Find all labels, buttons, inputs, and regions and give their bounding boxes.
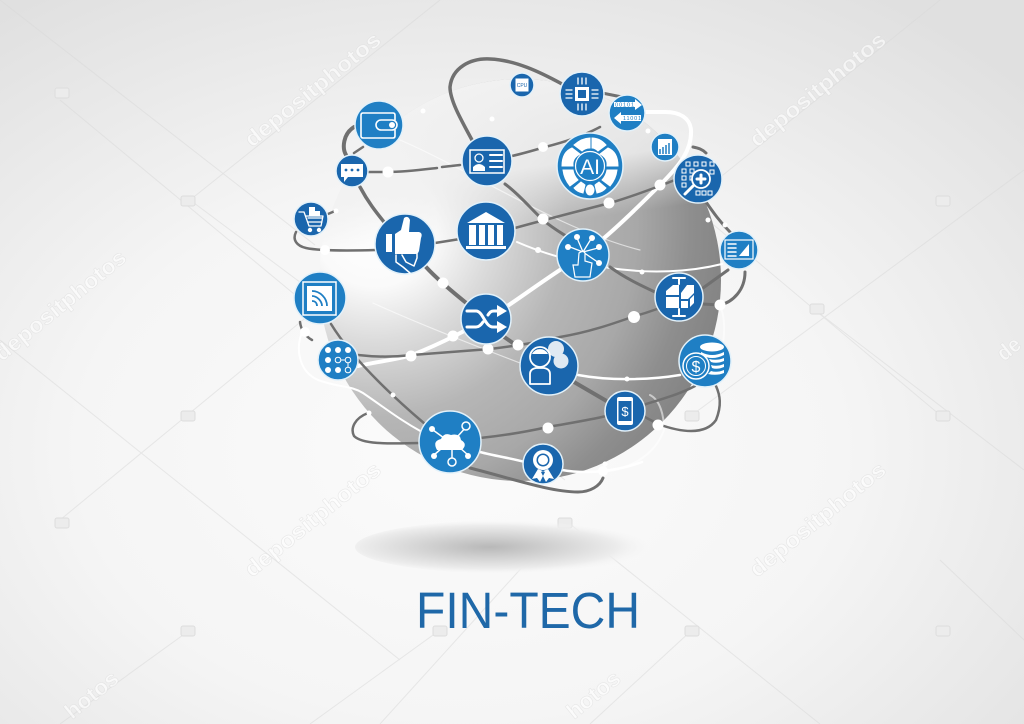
icon: users <box>520 337 578 395</box>
icon: AI brain: AI <box>580 156 600 179</box>
node dots <box>300 108 728 476</box>
icon: dashboard <box>720 231 758 269</box>
icon: processor <box>560 72 604 116</box>
watermarks: hotos <box>561 665 625 724</box>
watermarks: depositphotos <box>744 457 891 582</box>
icon: thumbs up <box>375 214 435 274</box>
icon: binary data: 11001 <box>623 116 641 122</box>
icon: coins: $ <box>692 359 701 376</box>
orbit lines: white behind <box>299 112 724 472</box>
icon: binary data <box>609 95 645 131</box>
icon: dot matrix <box>318 340 358 380</box>
icon: wallet <box>355 101 403 149</box>
icon: chat <box>336 155 368 187</box>
watermarks: depositphotos <box>492 241 639 366</box>
icon: AI brain <box>557 133 623 199</box>
watermarks: depositphotos <box>239 27 386 152</box>
orbit lines: dark <box>295 59 745 492</box>
icon: small cpu <box>510 73 534 97</box>
icon: magnifier grid <box>674 155 722 203</box>
ground shadow <box>355 520 675 574</box>
icon: touch network <box>557 229 609 281</box>
icon: mobile payment <box>605 391 645 431</box>
icon: shopping cart <box>294 202 328 236</box>
icon: cube <box>655 273 703 321</box>
title: FIN-TECH <box>416 582 640 639</box>
icon: small cpu: CPU <box>517 83 528 89</box>
icon: mobile payment: $ <box>621 404 629 419</box>
icon: report chart <box>651 133 679 161</box>
icon: shuffle arrows <box>461 294 511 344</box>
globe <box>319 79 721 481</box>
watermarks: depositphotos <box>239 457 386 582</box>
icon: award <box>523 444 563 484</box>
icon: id card <box>462 136 512 186</box>
icon: contactless card <box>294 272 346 324</box>
icon: bank <box>457 202 515 260</box>
icon: binary data: 00101 <box>615 102 634 108</box>
icon: coins <box>679 335 731 387</box>
icon: cloud network <box>419 411 481 473</box>
watermarks: hotos <box>59 665 123 724</box>
watermarks: depositphotos <box>744 27 891 152</box>
